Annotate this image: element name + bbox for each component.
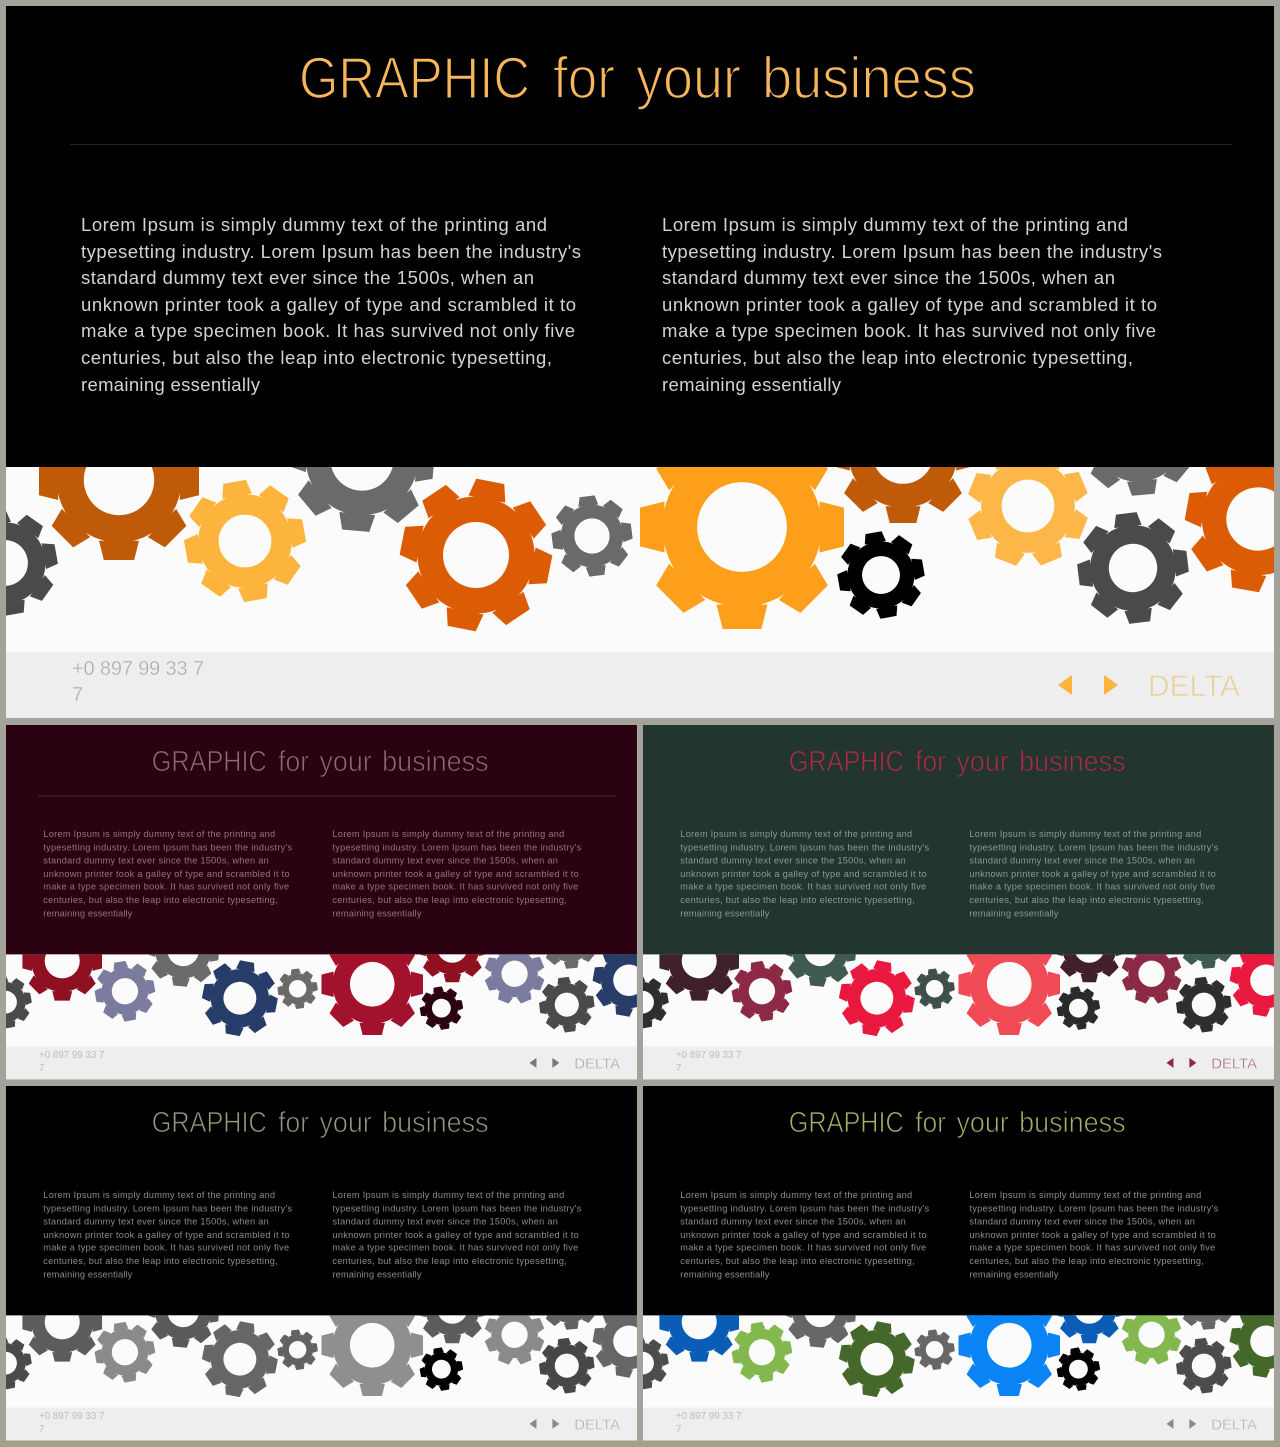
text block: left column: make a type specimen book. It has survived not only five (680, 882, 926, 892)
text block: left column: standard dummy text ever since the 1500s, when an (680, 1216, 906, 1226)
title: for (915, 746, 946, 778)
text block: left column: centuries, but also the leap into electronic typesetting, (81, 347, 552, 368)
gear band (6, 1315, 637, 1398)
footer (6, 1046, 637, 1079)
title: business (1019, 1107, 1126, 1139)
text block: left column: standard dummy text ever since the 1500s, when an (43, 855, 269, 865)
footer: +0 897 99 33 7 (676, 1411, 742, 1422)
text block: left column: make a type specimen book. It has survived not only five (43, 882, 289, 892)
text block: right column: standard dummy text ever since the 1500s, when an (332, 855, 558, 865)
text block: right column: typesetting industry. Lorem Ipsum has been the industry's (662, 241, 1162, 262)
text block: right column: centuries, but also the leap into electronic typesetting, (969, 895, 1204, 905)
footer: 7 (72, 684, 83, 706)
text block: right column (969, 1190, 1219, 1280)
text block: right column: make a type specimen book. It has survived not only five (332, 1243, 578, 1253)
text block: left column (81, 214, 581, 395)
text block: right column (969, 829, 1219, 919)
text block: left column: remaining essentially (43, 1270, 133, 1280)
text block: left column (43, 829, 293, 919)
footer: 7 (676, 1424, 682, 1435)
text block: left column: Lorem Ipsum is simply dummy text of the printing and (81, 214, 547, 235)
text block: left column: remaining essentially (81, 374, 261, 395)
footer: +0 897 99 33 7 (676, 1050, 742, 1061)
text block: right column: centuries, but also the leap into electronic typesetting, (332, 895, 567, 905)
title: business (382, 1107, 489, 1139)
text block: right column: remaining essentially (662, 374, 842, 395)
text block: right column (332, 1190, 582, 1280)
title (789, 1107, 1126, 1139)
footer: 7 (39, 1063, 45, 1074)
text block: right column: Lorem Ipsum is simply dummy text of the printing and (332, 829, 564, 839)
text block: right column: typesetting industry. Lorem Ipsum has been the industry's (332, 842, 582, 852)
text block: left column: remaining essentially (680, 909, 770, 919)
text block: left column: typesetting industry. Lorem Ipsum has been the industry's (680, 842, 930, 852)
title: for (278, 1107, 309, 1139)
text block: left column: centuries, but also the leap into electronic typesetting, (43, 1256, 278, 1266)
text block: right column: make a type specimen book. It has survived not only five (969, 882, 1215, 892)
text block: left column: Lorem Ipsum is simply dummy text of the printing and (43, 829, 275, 839)
title: GRAPHIC (152, 1107, 267, 1139)
text block: left column: unknown printer took a galley of type and scrambled it to (43, 1230, 290, 1240)
title: GRAPHIC (152, 746, 267, 778)
text block: right column: unknown printer took a galley of type and scrambled it to (332, 869, 579, 879)
title (152, 746, 489, 778)
footer (6, 1407, 637, 1440)
footer: DELTA (574, 1416, 620, 1433)
title: GRAPHIC (299, 46, 530, 111)
text block: right column: Lorem Ipsum is simply dummy text of the printing and (332, 1190, 564, 1200)
text block: left column: typesetting industry. Lorem Ipsum has been the industry's (81, 241, 581, 262)
gear band (643, 1315, 1274, 1398)
footer: +0 897 99 33 7 (39, 1411, 105, 1422)
title: for (553, 46, 615, 111)
text block: right column: Lorem Ipsum is simply dummy text of the printing and (969, 829, 1201, 839)
text block: right column: standard dummy text ever since the 1500s, when an (969, 1216, 1195, 1226)
text block: right column: make a type specimen book. It has survived not only five (969, 1243, 1215, 1253)
footer: 7 (39, 1424, 45, 1435)
title: GRAPHIC (789, 1107, 904, 1139)
text block: left column: Lorem Ipsum is simply dummy text of the printing and (680, 829, 912, 839)
text block: left column: standard dummy text ever since the 1500s, when an (680, 855, 906, 865)
text block: right column: unknown printer took a galley of type and scrambled it to (969, 869, 1216, 879)
panel: maroon slide (0, 725, 670, 1079)
title: for (915, 1107, 946, 1139)
text block: left column: centuries, but also the leap into electronic typesetting, (680, 895, 915, 905)
text block: left column: unknown printer took a galley of type and scrambled it to (680, 1230, 927, 1240)
text block: left column (680, 829, 930, 919)
text block: left column: typesetting industry. Lorem Ipsum has been the industry's (43, 842, 293, 852)
footer: DELTA (1211, 1055, 1257, 1072)
footer: +0 897 99 33 7 (72, 658, 204, 680)
text block: left column: remaining essentially (680, 1270, 770, 1280)
text block: left column: unknown printer took a galley of type and scrambled it to (81, 294, 576, 315)
footer: 7 (676, 1063, 682, 1074)
text block: right column: typesetting industry. Lorem Ipsum has been the industry's (969, 842, 1219, 852)
footer (643, 1407, 1274, 1440)
text block: right column: remaining essentially (969, 909, 1059, 919)
title: your (956, 746, 1009, 778)
text block: right column (662, 214, 1162, 395)
title: your (319, 746, 372, 778)
text block: right column: make a type specimen book. It has survived not only five (662, 320, 1156, 341)
text block: left column: Lorem Ipsum is simply dummy text of the printing and (43, 1190, 275, 1200)
title: business (1019, 746, 1126, 778)
text block: left column: standard dummy text ever since the 1500s, when an (43, 1216, 269, 1226)
text block: left column (43, 1190, 293, 1280)
text block: left column: standard dummy text ever since the 1500s, when an (81, 267, 534, 288)
text block: right column: Lorem Ipsum is simply dummy text of the printing and (662, 214, 1128, 235)
text block: right column: unknown printer took a galley of type and scrambled it to (332, 1230, 579, 1240)
text block: right column (332, 829, 582, 919)
gear band (6, 954, 637, 1036)
text block: left column: typesetting industry. Lorem Ipsum has been the industry's (680, 1203, 930, 1213)
title: your (956, 1107, 1009, 1139)
footer: DELTA (1148, 670, 1240, 703)
title: business (382, 746, 489, 778)
text block: right column: standard dummy text ever since the 1500s, when an (332, 1216, 558, 1226)
text block: right column: unknown printer took a galley of type and scrambled it to (662, 294, 1157, 315)
text block: left column: make a type specimen book. It has survived not only five (680, 1243, 926, 1253)
title: GRAPHIC (789, 746, 904, 778)
panel: dark green slide (613, 725, 1280, 1079)
text block: left column: make a type specimen book. It has survived not only five (43, 1243, 289, 1253)
panel: greyscale slide (0, 1086, 670, 1440)
text block: right column: typesetting industry. Lorem Ipsum has been the industry's (969, 1203, 1219, 1213)
text block: right column: centuries, but also the leap into electronic typesetting, (332, 1256, 567, 1266)
text block: left column: Lorem Ipsum is simply dummy text of the printing and (680, 1190, 912, 1200)
gear band (6, 467, 1274, 632)
gear band (643, 954, 1274, 1036)
title (299, 46, 976, 111)
title (789, 746, 1126, 778)
text block: right column: make a type specimen book. It has survived not only five (332, 882, 578, 892)
title: for (278, 746, 309, 778)
text block: left column: typesetting industry. Lorem Ipsum has been the industry's (43, 1203, 293, 1213)
text block: right column: standard dummy text ever since the 1500s, when an (969, 855, 1195, 865)
text block: right column: remaining essentially (332, 1270, 422, 1280)
text block: right column: remaining essentially (969, 1270, 1059, 1280)
title: business (762, 46, 976, 111)
footer: DELTA (1211, 1416, 1257, 1433)
text block: right column: centuries, but also the leap into electronic typesetting, (662, 347, 1133, 368)
text block: right column: typesetting industry. Lorem Ipsum has been the industry's (332, 1203, 582, 1213)
text block: right column: Lorem Ipsum is simply dummy text of the printing and (969, 1190, 1201, 1200)
text block: left column: remaining essentially (43, 909, 133, 919)
text block: left column: centuries, but also the leap into electronic typesetting, (43, 895, 278, 905)
text block: left column: centuries, but also the leap into electronic typesetting, (680, 1256, 915, 1266)
title: your (319, 1107, 372, 1139)
title: your (636, 46, 741, 111)
text block: left column: unknown printer took a galley of type and scrambled it to (680, 869, 927, 879)
footer: DELTA (574, 1055, 620, 1072)
footer (643, 1046, 1274, 1079)
text block: right column: remaining essentially (332, 909, 422, 919)
title (152, 1107, 489, 1139)
bottom strip (0, 1441, 1280, 1447)
footer: +0 897 99 33 7 (39, 1050, 105, 1061)
footer (6, 652, 1274, 718)
text block: right column: unknown printer took a galley of type and scrambled it to (969, 1230, 1216, 1240)
text block: right column: centuries, but also the leap into electronic typesetting, (969, 1256, 1204, 1266)
text block: left column: make a type specimen book. It has survived not only five (81, 320, 575, 341)
panel: blue and green slide (613, 1086, 1280, 1440)
text block: right column: standard dummy text ever since the 1500s, when an (662, 267, 1115, 288)
panel: main slide (0, 6, 1280, 718)
text block: left column: unknown printer took a galley of type and scrambled it to (43, 869, 290, 879)
text block: left column (680, 1190, 930, 1280)
